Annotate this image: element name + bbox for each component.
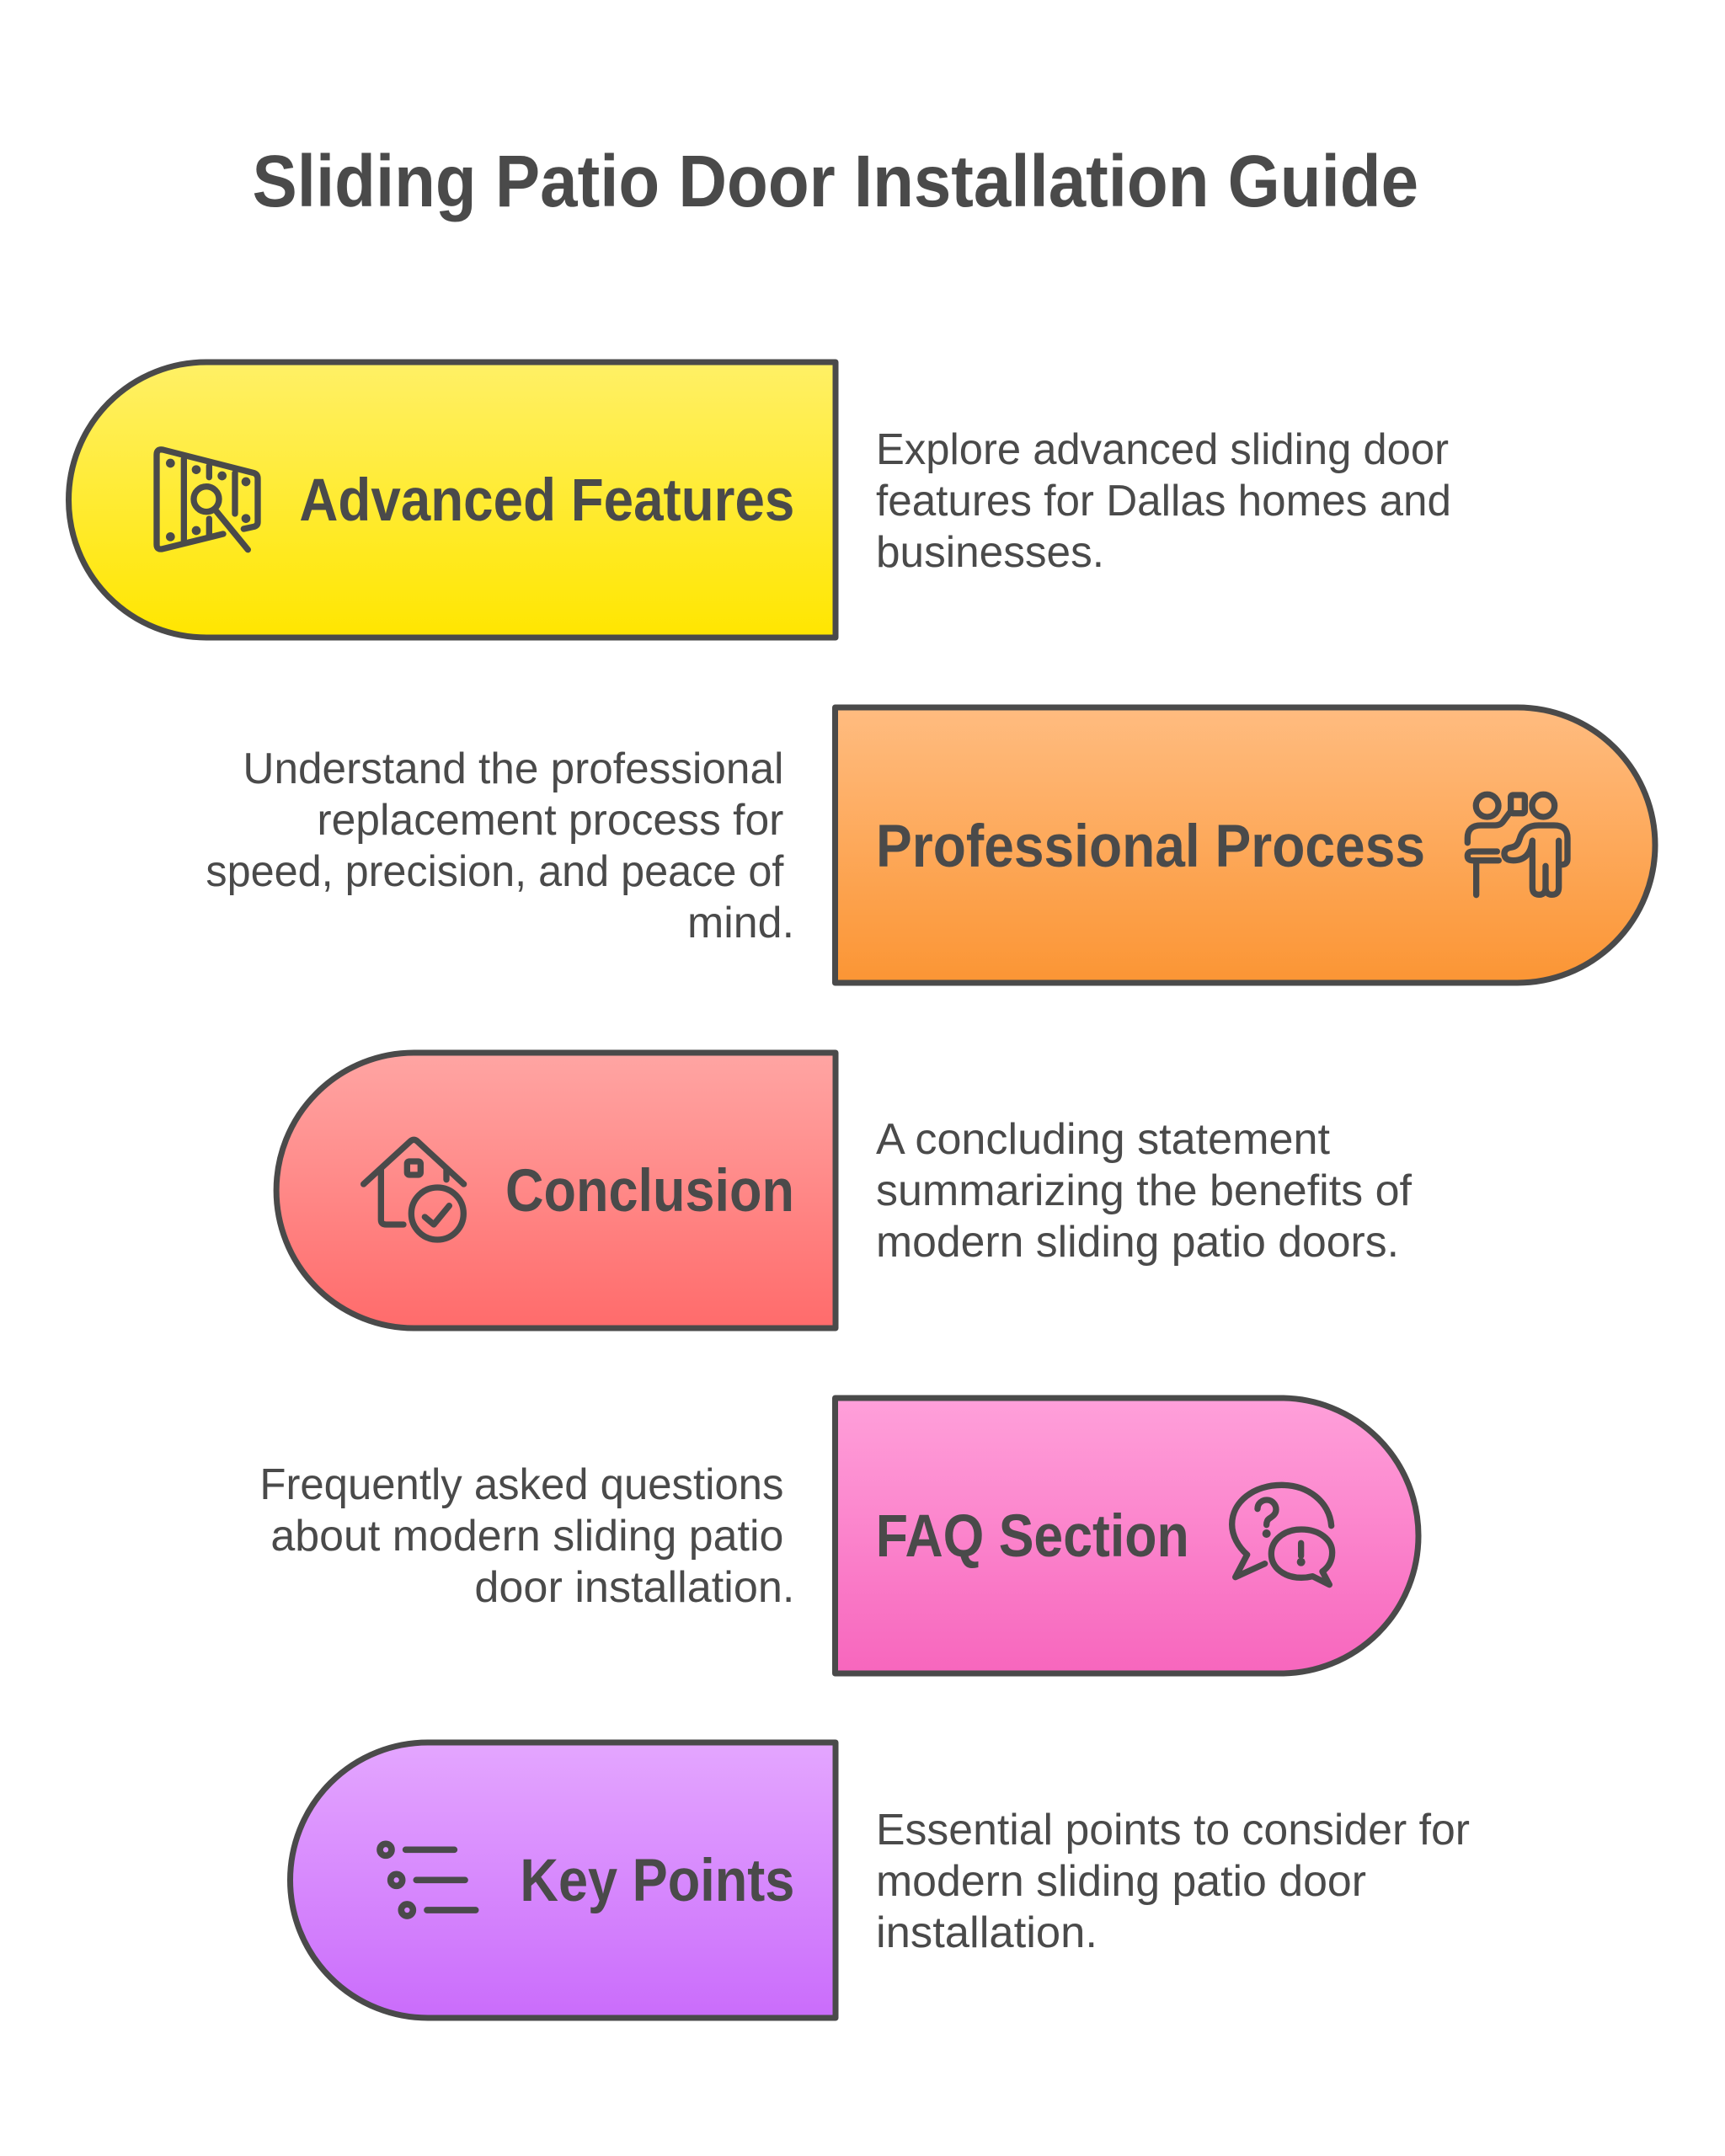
description: FAQ Section: Frequently asked questions xyxy=(259,1460,783,1509)
description: Professional Process: Understand the professional xyxy=(243,744,783,793)
description: FAQ Section xyxy=(259,1460,794,1612)
description: Advanced Features: Explore advanced sliding door xyxy=(876,425,1449,474)
icon: house with check mark xyxy=(364,1139,464,1240)
description: Key Points: modern sliding patio door xyxy=(876,1857,1366,1906)
description: Professional Process: speed, precision, and peace of xyxy=(206,847,784,896)
description: Advanced Features: businesses. xyxy=(876,528,1104,577)
description: Key Points: installation. xyxy=(876,1908,1097,1957)
label: Conclusion: Conclusion xyxy=(505,1158,794,1225)
icon: staggered bullet list xyxy=(380,1844,476,1916)
description: Conclusion: A concluding statement xyxy=(876,1115,1331,1164)
description: Professional Process: mind. xyxy=(687,899,794,947)
pill shape: Key Points xyxy=(290,1742,836,2018)
description: Conclusion xyxy=(876,1115,1413,1267)
description: Conclusion: modern sliding patio doors. xyxy=(876,1218,1399,1267)
description: Professional Process: replacement process for xyxy=(317,796,783,845)
pill shape: FAQ Section xyxy=(836,1398,1418,1673)
pill shape: Conclusion xyxy=(276,1053,836,1328)
panel: Professional Process xyxy=(836,707,1655,983)
description: FAQ Section: door installation. xyxy=(474,1563,794,1612)
label: Professional Process: Professional Process xyxy=(876,814,1425,880)
icon: question and exclamation speech bubbles xyxy=(1232,1485,1332,1585)
icon: two people at a table xyxy=(1467,794,1567,895)
panel: Conclusion xyxy=(276,1053,836,1328)
description: Advanced Features xyxy=(876,425,1451,577)
title: Sliding Patio Door Installation Guide xyxy=(253,141,1418,222)
panel: Advanced Features xyxy=(69,362,836,638)
description: Professional Process xyxy=(206,744,794,947)
pill shape: Professional Process xyxy=(836,707,1655,983)
panel: FAQ Section xyxy=(836,1398,1418,1673)
description: FAQ Section: about modern sliding patio xyxy=(270,1512,783,1561)
description: Conclusion: summarizing the benefits of xyxy=(876,1166,1413,1215)
label: Advanced Features: Advanced Features xyxy=(299,467,794,534)
description: Advanced Features: features for Dallas homes and xyxy=(876,477,1451,526)
label: Key Points: Key Points xyxy=(520,1848,794,1914)
description: Key Points xyxy=(876,1806,1470,1957)
icon: door panel with magnifier xyxy=(157,450,258,550)
panel: Key Points xyxy=(290,1742,836,2018)
description: Key Points: Essential points to consider for xyxy=(876,1806,1470,1854)
label: FAQ Section: FAQ Section xyxy=(876,1503,1189,1570)
pill shape: Advanced Features xyxy=(69,362,836,638)
